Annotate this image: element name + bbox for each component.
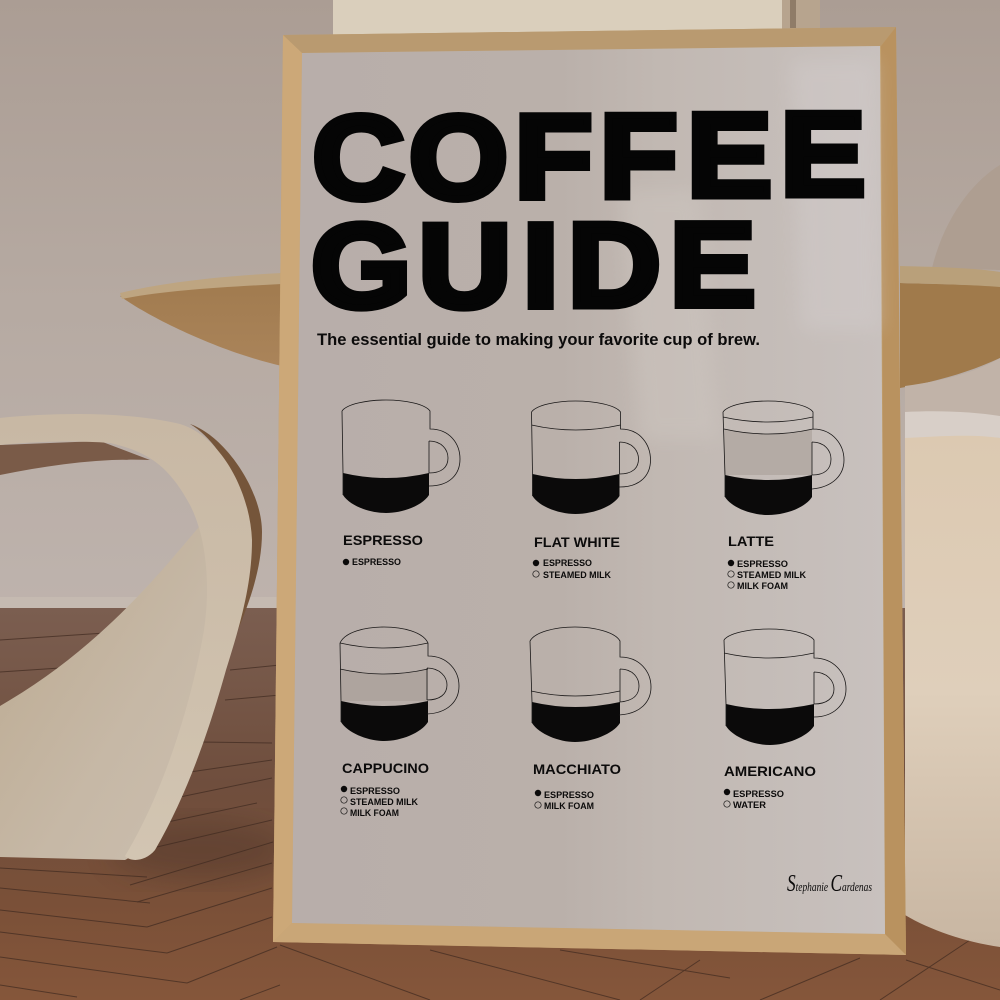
legend: latte: MILK FOAM <box>737 581 788 592</box>
title <box>311 88 865 333</box>
mug: espresso <box>342 400 460 513</box>
legend: flat white <box>533 558 611 581</box>
chair: left <box>0 414 262 860</box>
heading: cappucino: CAPPUCINO <box>342 760 429 776</box>
legend: latte: STEAMED MILK <box>737 570 806 581</box>
panel: espresso <box>342 400 460 568</box>
legend: americano <box>724 789 784 811</box>
legend: latte <box>728 559 806 592</box>
panel: latte <box>723 401 844 592</box>
legend: espresso: ESPRESSO <box>352 557 401 568</box>
legend: cappucino: ESPRESSO <box>350 786 400 797</box>
heading: espresso: ESPRESSO <box>343 532 423 548</box>
legend: macchiato: MILK FOAM <box>544 801 594 812</box>
chair: right <box>905 358 1000 947</box>
heading: latte: LATTE <box>728 533 774 549</box>
legend: flat white: STEAMED MILK <box>543 570 611 581</box>
mug: flat white <box>532 401 650 514</box>
panel: macchiato <box>530 627 651 812</box>
legend: macchiato <box>535 790 594 812</box>
legend: latte: ESPRESSO <box>737 559 788 570</box>
mug: macchiato <box>530 627 651 742</box>
chair back: right <box>932 165 1000 270</box>
signature: Stephanie Cardenas <box>787 871 872 897</box>
wooden frame <box>273 27 906 955</box>
title: COFFEE <box>312 88 865 225</box>
panel: cappucino <box>340 627 459 819</box>
table: left side <box>120 273 282 366</box>
legend: cappucino: STEAMED MILK <box>350 797 418 808</box>
mug: latte <box>723 401 844 515</box>
subtitle: The essential guide to making your favorite cup of brew. <box>317 331 760 349</box>
mug: cappucino <box>340 627 459 741</box>
legend: cappucino <box>341 786 418 819</box>
legend: americano: WATER <box>733 800 766 811</box>
heading: americano: AMERICANO <box>724 763 816 779</box>
legend: flat white: ESPRESSO <box>543 558 592 569</box>
title: GUIDE <box>311 199 756 333</box>
panel: flat white <box>532 401 650 581</box>
wall art behind <box>333 0 820 36</box>
legend: americano: ESPRESSO <box>733 789 784 800</box>
poster <box>292 46 885 934</box>
legend: cappucino: MILK FOAM <box>350 808 399 819</box>
panel: americano <box>724 629 846 811</box>
mug: americano <box>724 629 846 745</box>
legend: macchiato: ESPRESSO <box>544 790 594 801</box>
heading: macchiato: MACCHIATO <box>533 761 621 777</box>
heading: flat white: FLAT WHITE <box>534 534 620 550</box>
table: right side <box>900 266 1000 388</box>
